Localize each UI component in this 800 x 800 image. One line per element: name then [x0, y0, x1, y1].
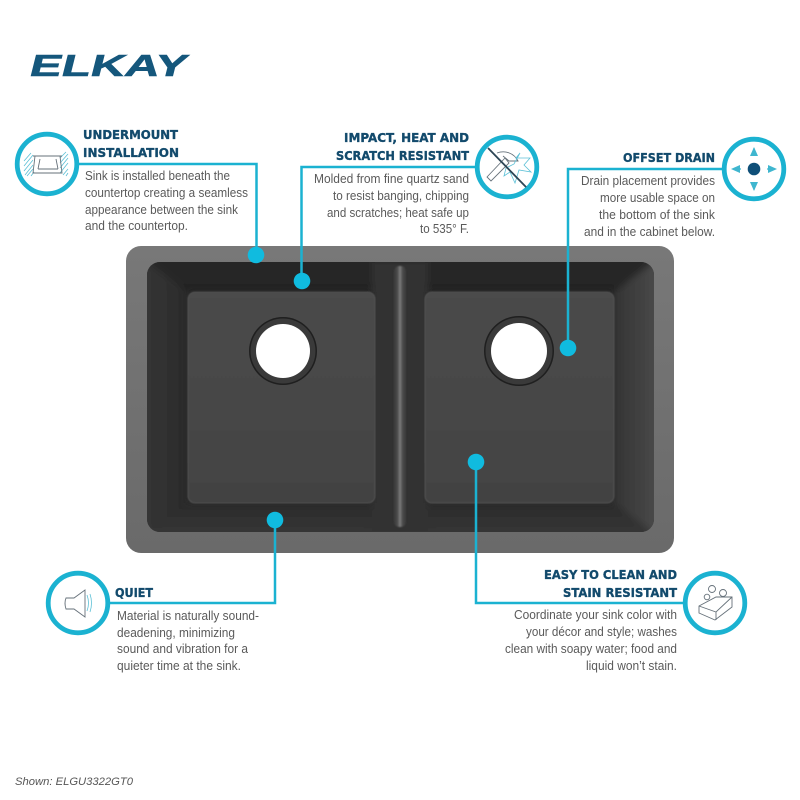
- heading: UNDERMOUNT: [83, 127, 179, 142]
- heading: [336, 130, 470, 163]
- icon: undermount sink: [17, 134, 77, 194]
- right basin floor: [425, 292, 614, 503]
- callout: quiet: [48, 512, 283, 673]
- heading: IMPACT, HEAT AND: [344, 130, 469, 145]
- body text: and the countertop.: [85, 219, 188, 233]
- heading: EASY TO CLEAN AND: [544, 567, 677, 582]
- body text: [314, 172, 469, 236]
- icon: speaker: [48, 573, 108, 633]
- body text: your décor and style; washes: [526, 625, 677, 639]
- body text: [85, 169, 248, 233]
- body text: [505, 608, 677, 673]
- caption: model shown: Shown: ELGU3322GT0: [15, 776, 134, 788]
- heading: [83, 127, 179, 160]
- icon: drain with arrows: [724, 139, 784, 199]
- callout: easy to clean and stain resistant: [468, 454, 745, 673]
- callout: impact, heat and scratch resistant: [294, 130, 537, 289]
- logo: Elkay: ELKAY: [26, 48, 192, 83]
- body text: countertop creating a seamless: [85, 186, 248, 200]
- leader line and dot: [468, 454, 700, 603]
- body text: Molded from fine quartz sand: [314, 172, 469, 186]
- body text: [581, 174, 716, 239]
- left basin floor: [188, 292, 375, 503]
- callout: undermount installation: [17, 127, 264, 263]
- body text: clean with soapy water; food and: [505, 642, 677, 656]
- body text: the bottom of the sink: [599, 208, 716, 222]
- heading: STAIN RESISTANT: [563, 585, 678, 600]
- heading: QUIET: [115, 585, 153, 600]
- heading: SCRATCH RESISTANT: [336, 148, 470, 163]
- body text: deadening, minimizing: [117, 626, 235, 640]
- body text: liquid won’t stain.: [586, 659, 677, 673]
- body text: quieter time at the sink.: [117, 659, 241, 673]
- icon: hammer and sparks: [477, 137, 537, 197]
- heading: [544, 567, 678, 600]
- body text: Material is naturally sound-: [117, 609, 259, 623]
- sink product image: [120, 240, 680, 553]
- basin interior: [147, 262, 654, 532]
- callout: offset drain: [560, 139, 784, 356]
- right drain: [484, 316, 554, 386]
- body text: Drain placement provides: [581, 174, 715, 188]
- leader line and dot: [60, 164, 264, 263]
- body text: appearance between the sink: [85, 203, 239, 217]
- heading: INSTALLATION: [83, 145, 179, 160]
- body text: to 535° F.: [420, 222, 469, 236]
- sink rim: [126, 246, 674, 553]
- body text: sound and vibration for a: [117, 642, 248, 656]
- body text: Coordinate your sink color with: [514, 608, 677, 622]
- body text: [117, 609, 259, 673]
- leader line and dot: [100, 512, 283, 603]
- body text: more usable space on: [600, 191, 715, 205]
- body text: and scratches; heat safe up: [327, 206, 469, 220]
- body text: Sink is installed beneath the: [85, 169, 230, 183]
- body text: and in the cabinet below.: [584, 225, 715, 239]
- icon: soap bar with bubbles: [685, 573, 745, 633]
- heading: OFFSET DRAIN: [623, 150, 715, 165]
- body text: to resist banging, chipping: [333, 189, 469, 203]
- leader line and dot: [560, 169, 730, 356]
- leader line and dot: [294, 167, 490, 289]
- left drain: [249, 317, 317, 385]
